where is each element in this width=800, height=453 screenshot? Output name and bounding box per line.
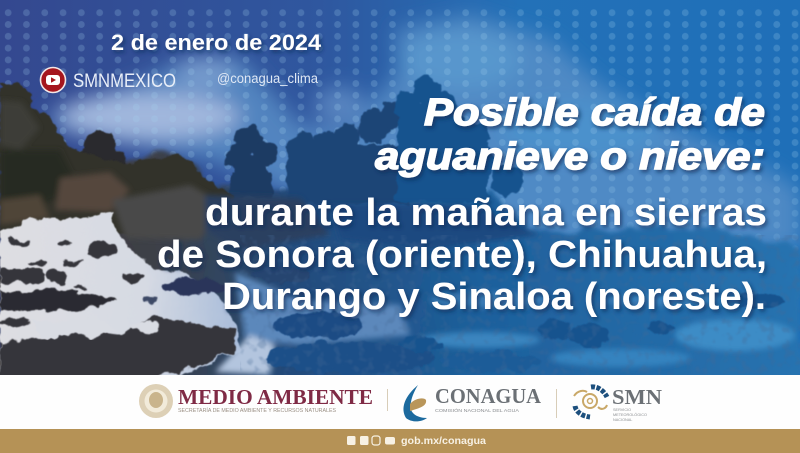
headline: aguanieve o nieve: xyxy=(375,136,765,178)
logo: SMN: NACIONAL xyxy=(613,418,632,422)
middle and right ground xyxy=(0,152,800,380)
logo: Conagua: COMISIÓN NACIONAL DEL AGUA xyxy=(435,407,520,413)
icon: SMN gear and spiral xyxy=(574,387,607,417)
large right tree xyxy=(393,76,523,202)
headline: Posible caída de xyxy=(424,92,765,134)
logo: Medio Ambiente: MEDIO AMBIENTE xyxy=(178,385,373,409)
logo: SMN: SERVICIO xyxy=(613,408,631,412)
snow slivers xyxy=(30,318,159,338)
headline xyxy=(375,92,765,178)
forecast text xyxy=(157,192,767,318)
forecast text: Durango y Sinaloa (noreste). xyxy=(222,276,766,318)
trees xyxy=(74,76,523,204)
logo: Conagua xyxy=(403,384,542,421)
social icons xyxy=(347,436,395,445)
logo: SMN xyxy=(574,385,662,422)
snow field xyxy=(0,212,240,378)
icon: national emblem xyxy=(139,384,173,418)
texture specks on blue ground xyxy=(240,235,799,374)
YouTube channel name: SMNMEXICO xyxy=(73,71,176,92)
bluish snow patches xyxy=(215,272,795,375)
social handle: @conagua_clima xyxy=(217,71,318,86)
icon: YouTube badge xyxy=(40,68,66,92)
clouds xyxy=(45,15,800,250)
website: gob.mx/conagua xyxy=(401,436,486,447)
dot grid xyxy=(4,9,798,248)
rocky hill left xyxy=(0,82,235,239)
far-left tree xyxy=(80,129,126,164)
logo: Medio Ambiente xyxy=(139,384,373,418)
logo: Conagua: CONAGUA xyxy=(435,384,542,408)
tree group xyxy=(287,100,407,204)
dark rocks on snow xyxy=(0,240,235,380)
footer gold band xyxy=(0,429,800,453)
hill shading xyxy=(0,100,540,250)
forecast text: durante la mañana en sierras xyxy=(205,192,767,234)
icon: Conagua wave xyxy=(403,385,427,421)
central tree xyxy=(225,126,277,198)
forecast text: de Sonora (oriente), Chihuahua, xyxy=(157,234,767,276)
logo: SMN: SMN xyxy=(612,385,662,409)
logo: SMN: METEOROLÓGICO xyxy=(613,412,647,417)
dark blue blotches xyxy=(163,267,784,374)
footer logo band xyxy=(0,375,800,429)
logo: Medio Ambiente: SECRETARÍA DE MEDIO AMBIENTE Y RECURSOS NATURALES xyxy=(178,407,337,414)
date: 2 de enero de 2024 xyxy=(111,30,322,55)
